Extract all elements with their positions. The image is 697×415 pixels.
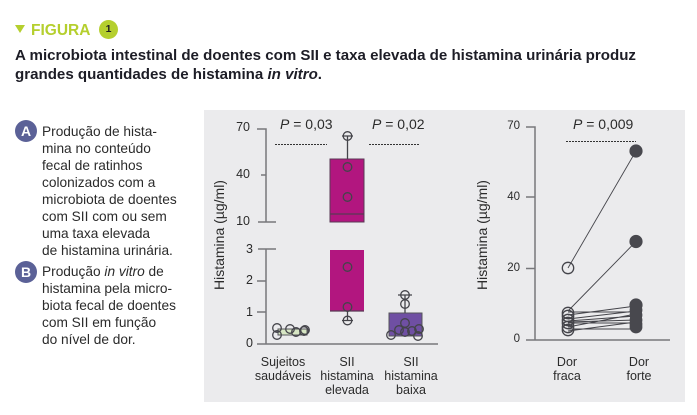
axis B labels: 70 [507,120,520,132]
category labels A: baixa [396,383,426,397]
text A: microbiota de doentes [42,192,177,207]
text B: histamina pela micro- [42,281,172,296]
text B: do nível de dor. [42,332,136,347]
axis A labels: 3 [246,242,253,256]
text B: com SII em função [42,315,156,330]
badge A [15,120,37,142]
panel B description [15,261,176,347]
category labels B: Dor [557,355,577,369]
axis B labels: 20 [507,262,520,274]
figure label [15,20,118,39]
significance B: P = 0,009 [573,116,634,132]
category labels A: histamina [320,369,374,383]
category labels A: elevada [325,383,369,397]
text A: de histamina urinária. [42,243,173,258]
category labels A: SII [403,355,419,369]
paired lines [568,151,636,331]
significance A right: P = 0,02 [372,116,425,132]
filled circles: severe pain [629,144,643,333]
axis A labels: 10 [236,214,250,228]
axis B [526,127,670,340]
axis B title: Histamina (µg/ml) [474,180,490,290]
significance A right [369,116,425,144]
significance B [566,116,636,142]
chart A: box plot [211,116,438,397]
box: low histamine IBS [387,291,423,340]
badge B: B [21,264,31,280]
category labels B: fraca [553,369,581,383]
axis A labels: 70 [236,120,250,134]
title: grandes quantidades de histamina in vitro. [15,66,322,83]
category labels A [255,355,438,397]
axis A title: Histamina (µg/ml) [211,180,227,290]
category labels A: saudáveis [255,369,311,383]
text B [42,264,176,347]
text A: mina no conteúdo [42,141,151,156]
figure word: FIGURA [31,22,90,39]
text B: Produção in vitro de [42,264,164,279]
significance A left: P = 0,03 [280,116,333,132]
open circles: mild pain [562,262,574,336]
text A [42,124,177,258]
icon: green triangle [15,25,25,33]
category labels A: histamina [384,369,438,383]
category labels B: Dor [629,355,649,369]
text A: uma taxa elevada [42,226,150,241]
axis A labels: 0 [246,336,253,350]
category labels A: SII [339,355,355,369]
axis A labels: 1 [246,305,253,319]
text A: Produção de hista- [42,124,157,139]
text A: colonizados com a [42,175,155,190]
significance A left [275,116,333,144]
axis B labels: 0 [514,333,520,345]
text A: com SII com ou sem [42,209,167,224]
category labels B [553,355,652,383]
badge B [15,261,37,283]
axis A labels: 2 [246,273,253,287]
axis A [257,129,438,344]
badge A: A [21,123,31,139]
box: healthy subjects [273,324,309,339]
axis A labels: 40 [236,167,250,181]
panel A description [15,120,177,258]
figure number badge [99,20,118,39]
category labels B: forte [626,369,652,383]
axis B labels [507,120,520,345]
category labels A: Sujeitos [261,355,305,369]
axis B labels: 40 [507,191,520,203]
text B: biota fecal de doentes [42,298,176,313]
title [15,47,636,83]
text A: fecal de ratinhos [42,158,142,173]
figure number badge: 1 [106,23,111,35]
title: A microbiota intestinal de doentes com SII e taxa elevada de histamina urinária produz [15,47,636,64]
axis A labels [236,120,253,350]
box: high histamine IBS [330,132,364,325]
chart B: paired dots [474,116,670,383]
chart panel background [204,110,685,402]
